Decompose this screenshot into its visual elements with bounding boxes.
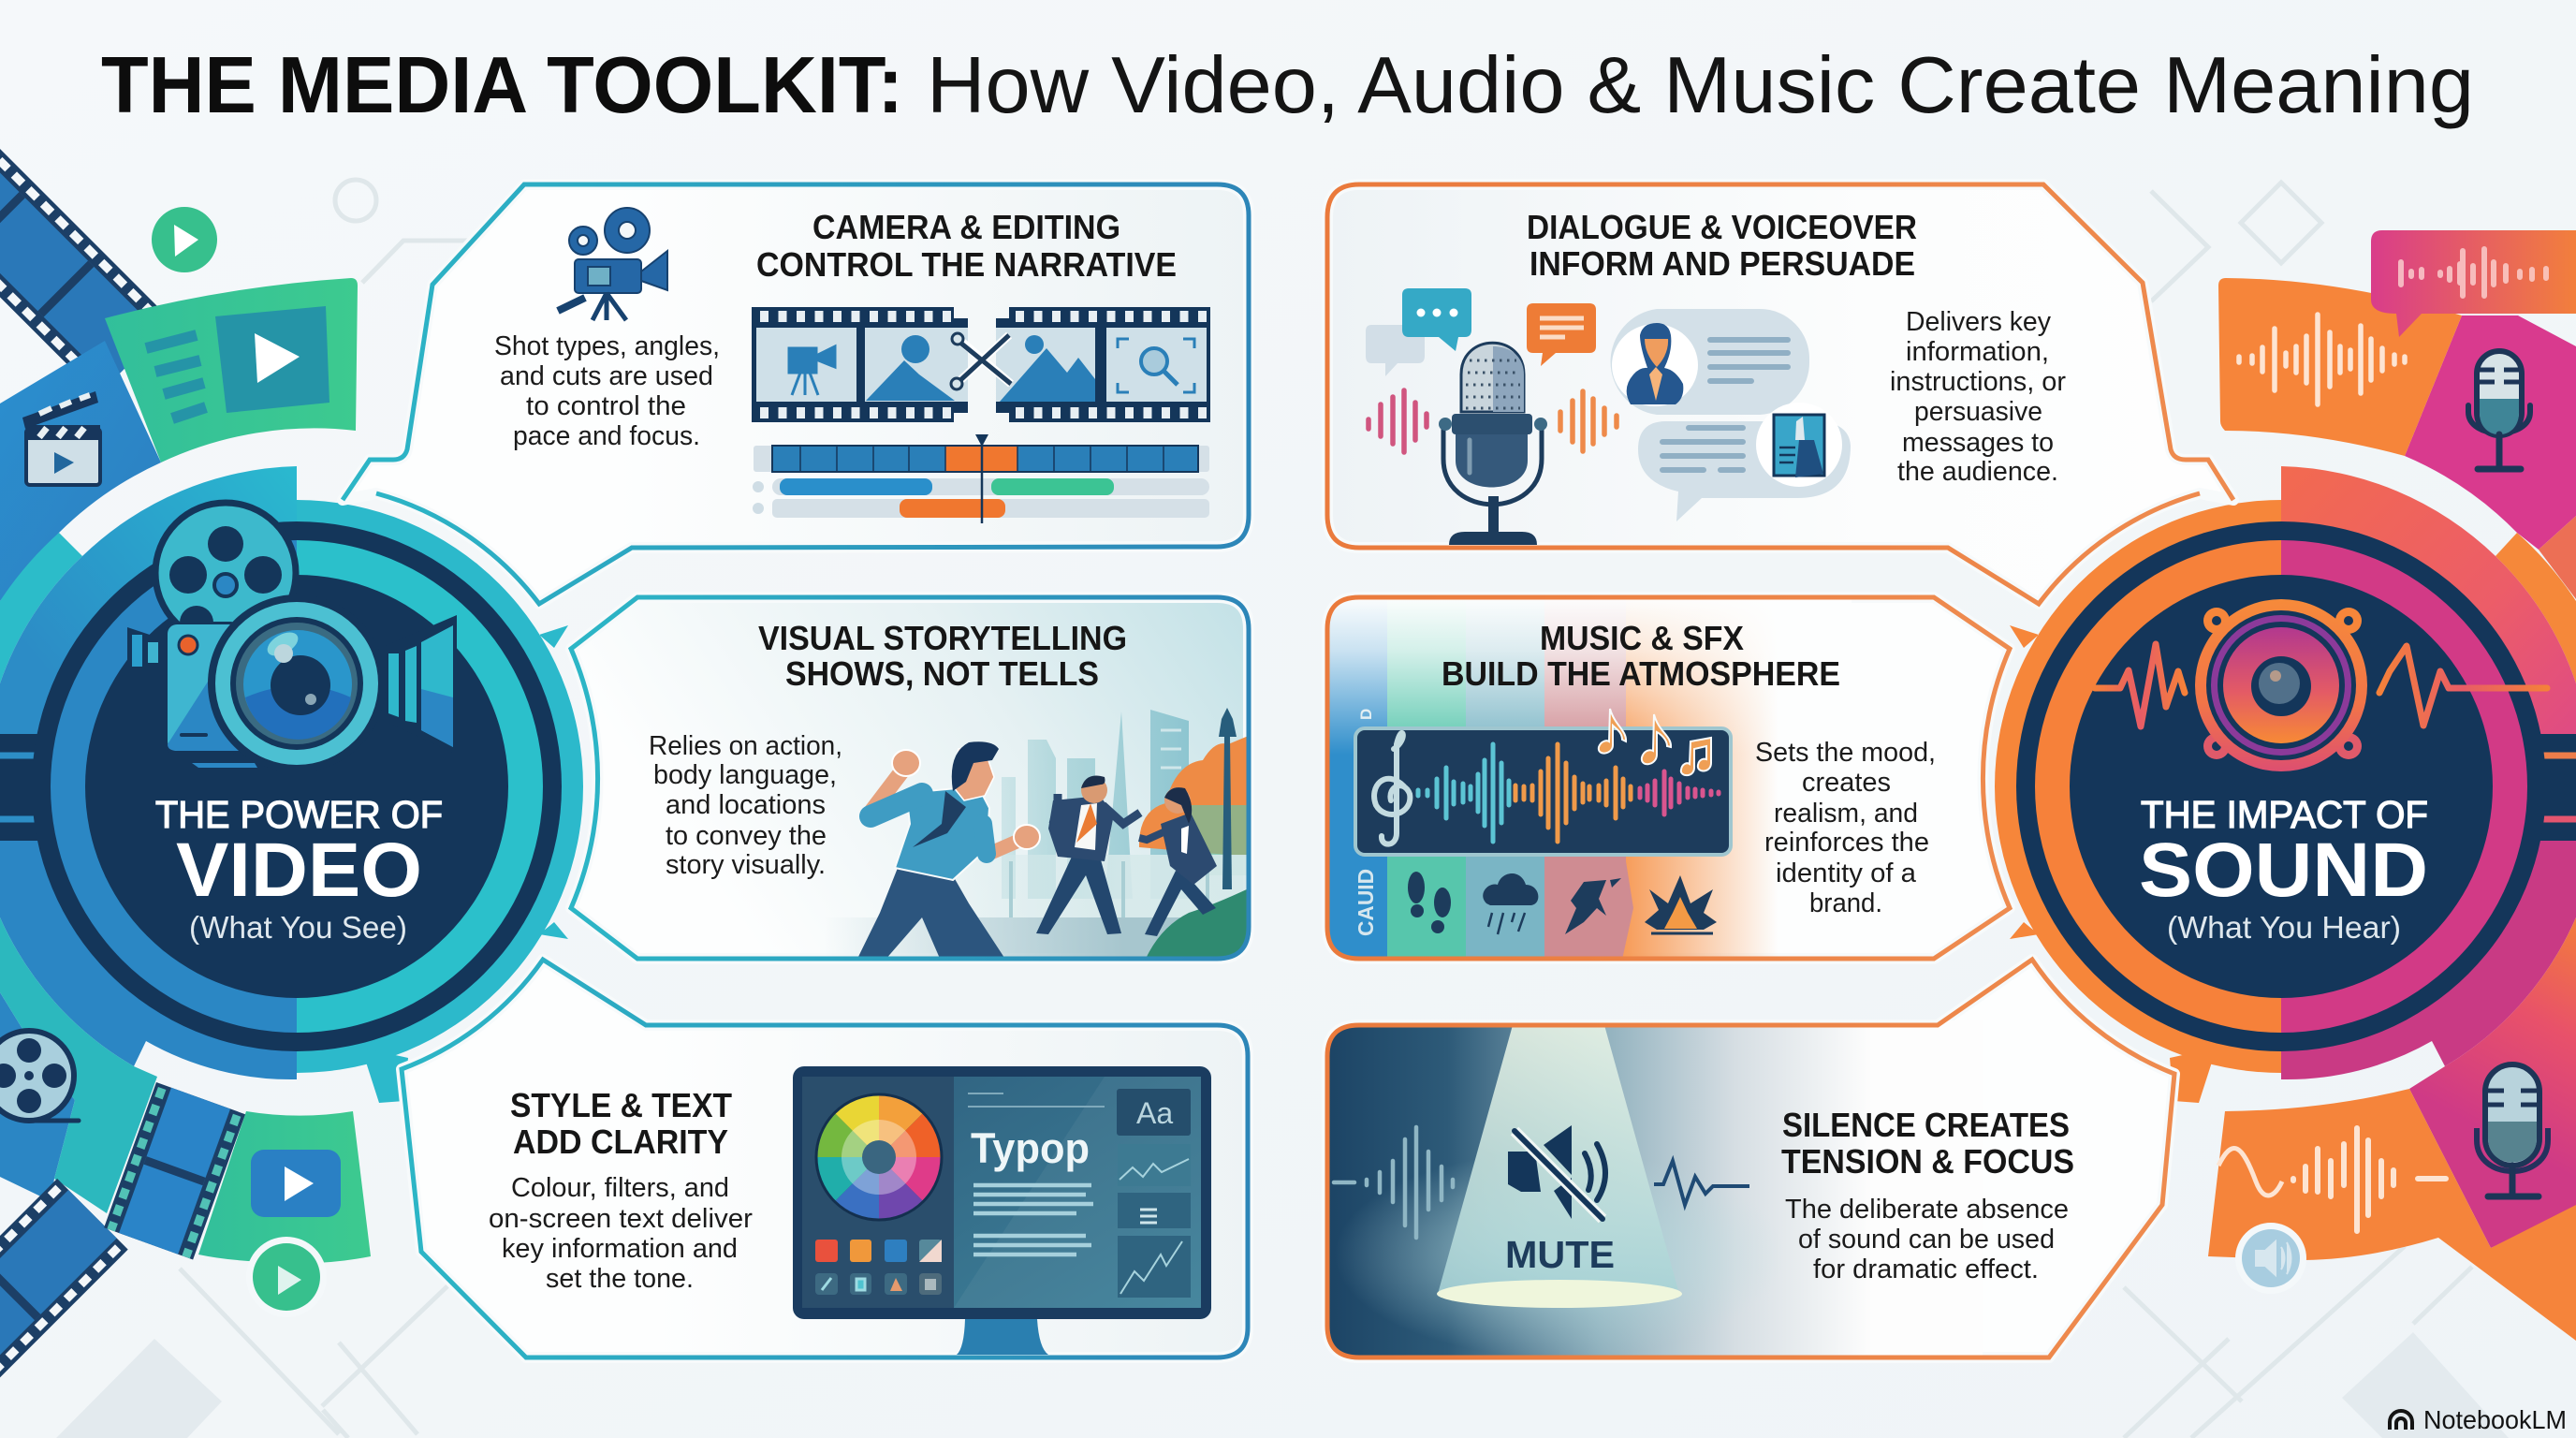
speech bubbles — [1366, 288, 1596, 376]
panel: music and sfx — [1327, 595, 2010, 960]
column labels: D — [1357, 709, 1375, 720]
body text: instructions, or — [1890, 367, 2066, 397]
icon: video camera with reel — [127, 503, 457, 772]
panel: style and text — [402, 960, 1248, 1357]
sound waves beside microphone — [1368, 390, 1617, 452]
body text: Sets the mood, — [1755, 738, 1936, 768]
hub navy disc — [85, 575, 508, 998]
lower left teal wedge — [0, 917, 157, 1213]
body text — [1890, 307, 2066, 487]
swatches — [815, 1240, 942, 1295]
hub: the impact of sound — [1995, 500, 2576, 1103]
right outer ring lower — [2281, 786, 2576, 1079]
sfx colour columns — [1329, 605, 1771, 957]
hub panel tail teal — [361, 1048, 408, 1103]
title: THE MEDIA TOOLKIT: — [101, 41, 903, 130]
icon: crash silhouette — [1565, 878, 1621, 934]
hub inner ring left — [51, 540, 297, 1033]
body text: of sound can be used — [1798, 1225, 2055, 1255]
hub title video: VIDEO — [176, 828, 422, 913]
pulse line — [1654, 1161, 1749, 1205]
typography preview: Typop — [971, 1124, 1090, 1172]
icon: movie camera — [558, 208, 667, 320]
hub title sound: (What You Hear) — [2167, 910, 2401, 945]
hub inner ring orange half — [2035, 540, 2281, 1033]
heading: SHOWS, NOT TELLS — [785, 654, 1099, 693]
heading — [1527, 208, 1917, 283]
illustration: city action scene — [824, 708, 1251, 961]
heading: INFORM AND PERSUADE — [1530, 244, 1915, 283]
body text: creates — [1802, 768, 1891, 798]
icon: play circle bottom — [246, 1237, 327, 1317]
title — [101, 41, 2474, 130]
icon: explosion — [1645, 875, 1717, 933]
body text: to convey the — [666, 821, 827, 851]
hub inner ring right — [297, 540, 543, 1033]
heading: BUILD THE ATMOSPHERE — [1442, 654, 1840, 693]
title: How Video, Audio & Music Create Meaning — [927, 41, 2474, 130]
hub panel tail orange — [2170, 1048, 2217, 1103]
icon: play circle top — [152, 207, 217, 272]
heading: ADD CLARITY — [513, 1123, 728, 1161]
body text: set the tone. — [546, 1264, 694, 1294]
heading — [510, 1086, 732, 1161]
body text — [489, 1173, 753, 1294]
panel: dialogue and voiceover — [1327, 184, 2233, 604]
heading: VISUAL STORYTELLING — [758, 619, 1127, 657]
right outer ring top — [2281, 466, 2576, 786]
heading: TENSION & FOCUS — [1781, 1142, 2074, 1181]
body text: pace and focus. — [513, 421, 700, 451]
heading — [756, 208, 1177, 284]
main man figure — [856, 741, 1040, 961]
hub title sound: THE IMPACT OF — [2141, 793, 2428, 836]
lower left blue wedge — [0, 992, 75, 1201]
dark gradient and spotlight — [1329, 1028, 1844, 1356]
blue sector top left — [0, 341, 161, 601]
film strip bottom left lower — [0, 1179, 128, 1438]
hub connector bar left — [0, 734, 66, 841]
body text — [494, 331, 720, 451]
mute label: MUTE — [1505, 1233, 1615, 1276]
hub inner ring pink half — [2281, 540, 2527, 1033]
heading — [1442, 619, 1840, 693]
dialogue card presenter — [1611, 309, 1809, 415]
body text: body language, — [653, 760, 837, 790]
heading: DIALOGUE & VOICEOVER — [1527, 208, 1917, 246]
typography preview — [968, 1093, 1105, 1255]
icon: microphone — [1439, 343, 1547, 545]
panel: visual storytelling — [571, 597, 1251, 961]
body text: brand. — [1809, 888, 1882, 918]
body text: story visually. — [666, 850, 826, 880]
icon: speaker circle — [2235, 1223, 2306, 1294]
heading: STYLE & TEXT — [510, 1086, 732, 1124]
green video panel bottom left — [198, 1111, 371, 1263]
body text: reinforces the — [1764, 828, 1929, 858]
right lower gradient wedge — [2409, 917, 2576, 1248]
panel: silence — [1327, 960, 2174, 1362]
editing timeline — [753, 434, 1209, 523]
film strip bottom left upper — [104, 1082, 245, 1259]
icon: music notes — [1599, 709, 1711, 775]
body text — [1755, 738, 1936, 918]
heading: SILENCE CREATES — [1782, 1106, 2070, 1144]
heading: MUSIC & SFX — [1540, 619, 1744, 657]
hub connector bar right — [2510, 734, 2576, 841]
woman figure — [1139, 787, 1217, 936]
body text: the audience. — [1897, 457, 2058, 487]
body text: realism, and — [1774, 799, 1918, 829]
icon: microphone bottom right — [2477, 1064, 2548, 1196]
hub title video: (What You See) — [189, 910, 407, 945]
watermark: NotebookLM: NotebookLM — [2423, 1405, 2567, 1434]
hub title video — [155, 793, 443, 945]
heading — [758, 619, 1127, 693]
hub: the power of video — [0, 500, 583, 1103]
body text: to control the — [526, 391, 686, 421]
panel: camera and editing — [343, 184, 1249, 604]
body text — [1785, 1195, 2069, 1284]
second man figure — [1036, 775, 1140, 934]
heading: CONTROL THE NARRATIVE — [756, 245, 1177, 284]
hub title sound: SOUND — [2139, 828, 2428, 913]
waveform display — [1355, 728, 1731, 855]
orange panel top right — [2218, 278, 2462, 456]
monitor illustration — [793, 1066, 1211, 1355]
film strip top left — [0, 95, 172, 395]
speech bubble waveform top right — [2371, 230, 2576, 337]
icon: film reel — [0, 1031, 79, 1121]
body text: The deliberate absence — [1785, 1195, 2069, 1225]
body text: information, — [1906, 337, 2049, 367]
icon: speaker with pulse — [2095, 599, 2547, 771]
heading — [1781, 1106, 2074, 1181]
column labels — [1354, 709, 1378, 936]
green video panel top left — [105, 278, 358, 462]
icon: clapperboard — [22, 391, 100, 485]
icon: footprints — [1408, 872, 1451, 933]
hub left half outer ring right — [1995, 500, 2281, 1073]
teal outer band left — [0, 533, 82, 683]
hub title video: THE POWER OF — [155, 793, 443, 836]
hub dark ring — [32, 521, 562, 1051]
right coral corner — [2539, 516, 2576, 599]
body text — [649, 731, 842, 880]
film strip with scissors — [752, 307, 1210, 422]
blue outer ring bottom left — [0, 786, 297, 1079]
side widgets: Aa — [1136, 1096, 1173, 1130]
body text: and cuts are used — [500, 361, 713, 391]
body text: on-screen text deliver — [489, 1204, 753, 1234]
body text: key information and — [502, 1234, 738, 1264]
icon: mute speaker — [1508, 1125, 1605, 1219]
body text: identity of a — [1776, 858, 1917, 888]
side widgets — [1117, 1089, 1191, 1298]
sfx icons — [1408, 872, 1717, 934]
icon: rain cloud — [1483, 873, 1538, 934]
waveform dim — [1334, 1127, 1453, 1238]
body text: Shot types, angles, — [494, 331, 720, 361]
icon: microphone top right — [2468, 351, 2530, 469]
orange panel bottom right — [2208, 1089, 2576, 1341]
color wheel — [816, 1094, 942, 1220]
column labels: CAUID — [1354, 869, 1378, 936]
body text: Delivers key — [1906, 307, 2051, 337]
body text: persuasive — [1914, 397, 2042, 427]
body text: Colour, filters, and — [511, 1173, 729, 1203]
right orange band — [2496, 533, 2576, 683]
hub navy disc right — [2070, 575, 2493, 998]
dialogue card document — [1638, 403, 1851, 521]
body text: for dramatic effect. — [1813, 1255, 2039, 1284]
hub dark ring right — [2016, 521, 2546, 1051]
hub title sound — [2139, 793, 2428, 945]
heading: CAMERA & EDITING — [812, 208, 1120, 246]
body text: Relies on action, — [649, 731, 842, 761]
right top pink sector — [2405, 315, 2576, 550]
hub right half outer ring — [297, 500, 583, 1073]
outer ring top left — [0, 466, 297, 786]
body text: and locations — [666, 790, 826, 820]
body text: messages to — [1902, 428, 2054, 458]
